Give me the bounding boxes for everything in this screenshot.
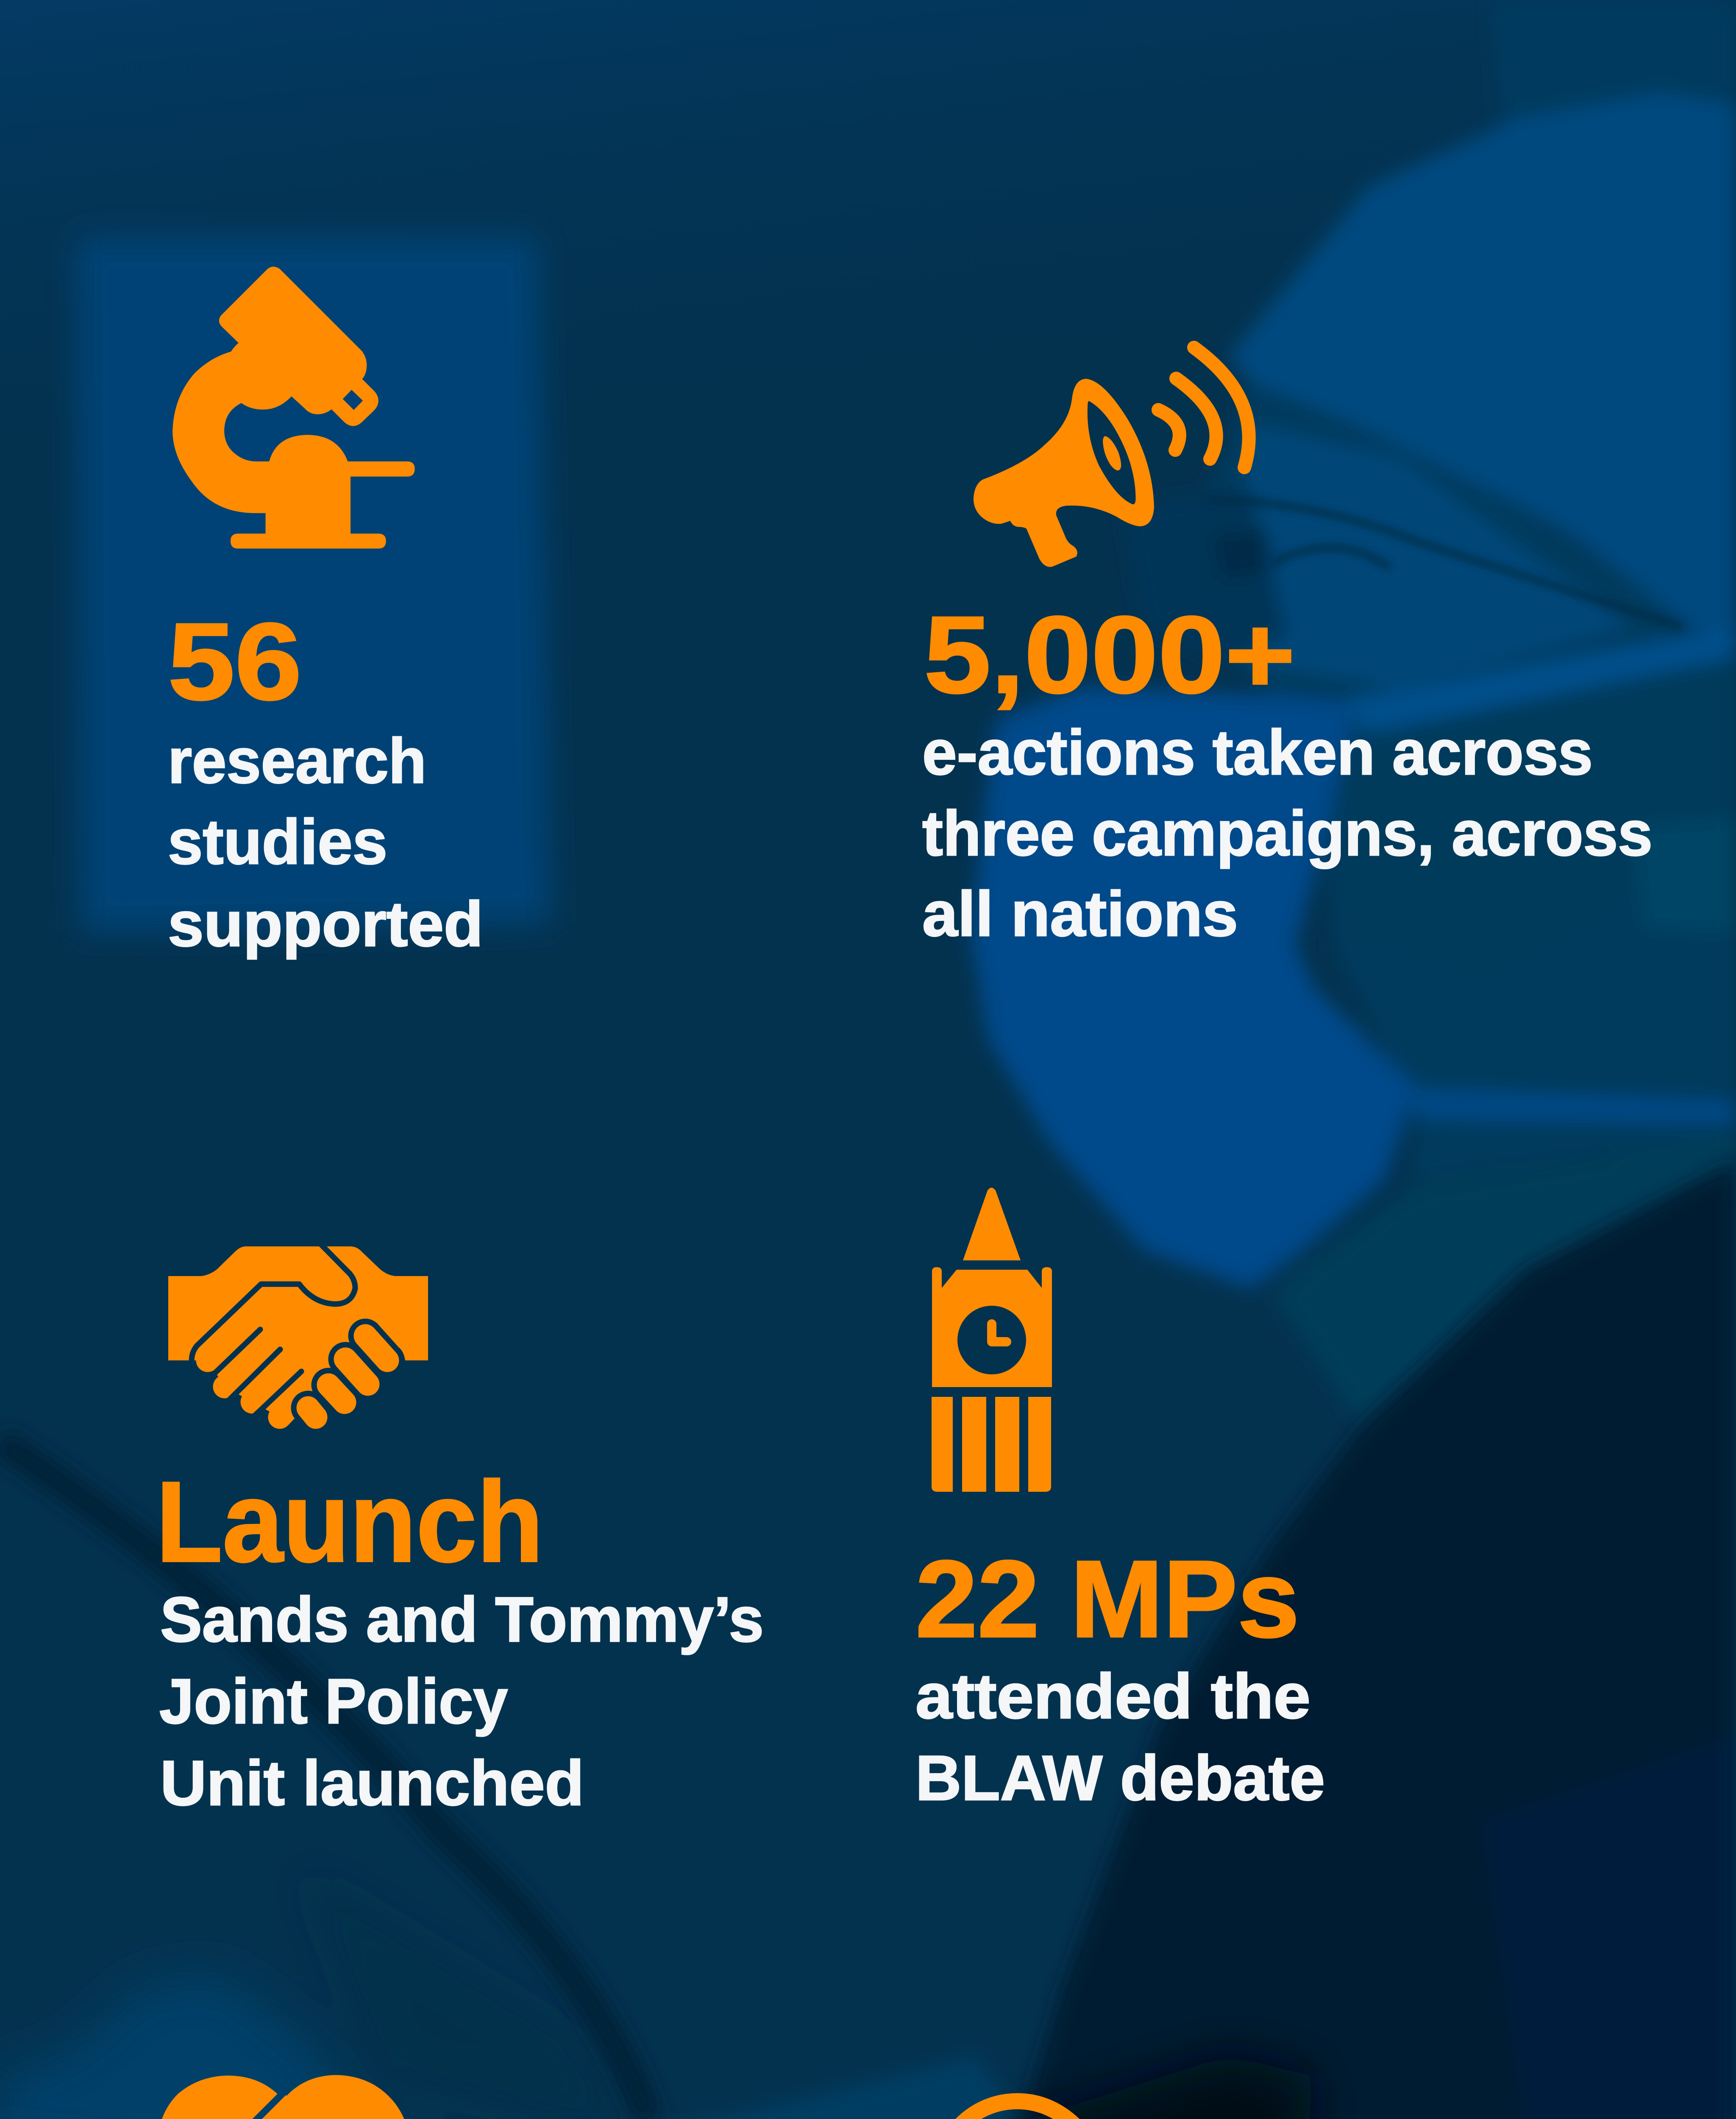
- icon: microscope: [172, 267, 415, 548]
- description: research studies supported: research: [168, 725, 426, 796]
- panel: policy unit launch: [156, 1237, 764, 1819]
- panel: professional groups: [162, 2075, 404, 2119]
- stat: 5,000+: 5,000+: [924, 593, 1295, 716]
- description: e-actions taken: all nations: [922, 878, 1238, 949]
- panel: MPs at debate: [915, 1187, 1325, 1813]
- icon: Big Ben clock tower: [932, 1187, 1052, 1492]
- description: e-actions taken: [922, 717, 1653, 949]
- icon: handshake: [168, 1246, 428, 1429]
- description: research studies supported: supported: [168, 888, 483, 959]
- description: attended the BLAW debate: [915, 1660, 1325, 1813]
- description: research studies supported: [168, 725, 483, 959]
- description: e-actions taken: e-actions taken across: [922, 717, 1593, 788]
- description: joint policy unit: [159, 1584, 764, 1819]
- stat: 22 MPs: 22 MPs: [915, 1538, 1299, 1660]
- icon: heart handshake: [144, 2055, 424, 2119]
- description: research studies supported: studies: [168, 806, 387, 877]
- panel: professionals trained: [908, 2101, 1571, 2119]
- description: attended the BLAW debate: BLAW debate: [915, 1742, 1325, 1813]
- icon: ear: [937, 2101, 1082, 2119]
- description: e-actions taken: three campaigns, across: [922, 798, 1653, 869]
- panel: research studies: [168, 267, 483, 959]
- icon: megaphone: [974, 348, 1249, 567]
- stat: Launch: Launch: [156, 1458, 543, 1586]
- stat: 56: 56: [168, 600, 302, 723]
- description: joint policy unit: Unit launched: [160, 1747, 584, 1819]
- description: joint policy unit: Joint Policy: [159, 1666, 508, 1737]
- panel: e-actions: [922, 348, 1653, 949]
- description: attended the BLAW debate: attended the: [915, 1660, 1310, 1732]
- description: joint policy unit: Sands and Tommy’s: [160, 1584, 764, 1655]
